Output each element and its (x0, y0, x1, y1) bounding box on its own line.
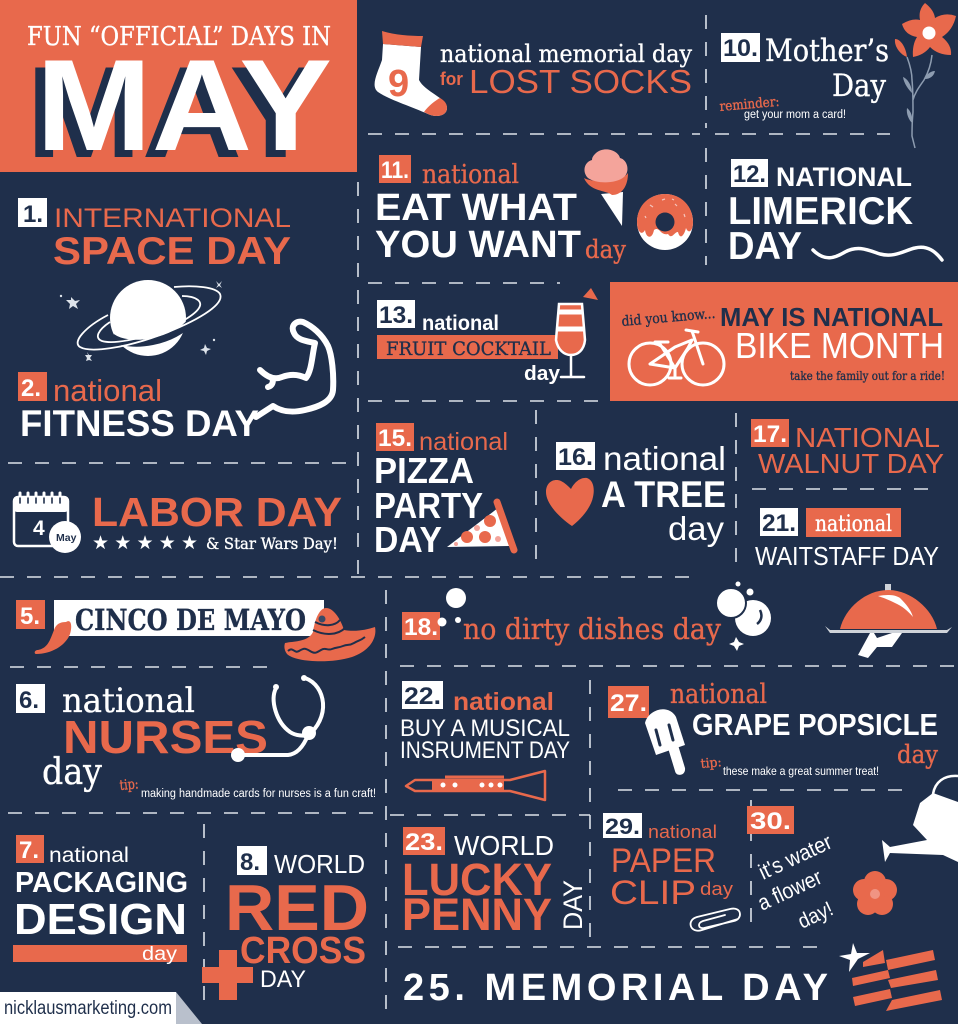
day 15: pizza party day: PIZZA (374, 450, 474, 491)
day 23: world lucky penny day: 23. (405, 829, 443, 856)
icon: popsicle (645, 709, 685, 775)
icon: sock (375, 31, 447, 116)
icon: wave line (813, 247, 942, 260)
day 2: national fitness day: 2. (21, 375, 41, 402)
day 11: eat what you want day: day (585, 235, 627, 264)
day 10: mother's day: Day (832, 68, 886, 104)
day 12: national limerick day: LIMERICK (728, 190, 913, 233)
day 29: national paper clip day: 29. (605, 814, 640, 839)
day 11: eat what you want day (375, 155, 627, 266)
day 16: national hug a tree day: 16. (558, 444, 593, 471)
day 13: fruit cocktail day: national (422, 312, 499, 335)
credit tab (0, 992, 202, 1024)
day 27: national grape popsicle day: these make a great summer treat! (723, 764, 879, 778)
day 10: mother's day: Mother’s (765, 33, 889, 69)
credit tab: nicklausmarketing.com (4, 998, 172, 1019)
icon: cocktail glass (556, 288, 598, 377)
day 5: cinco de mayo: 5. (20, 603, 40, 630)
icon: soap bubbles (716, 582, 771, 651)
icon: flower blossom (853, 871, 897, 915)
icon: calendar: 4 (33, 517, 45, 540)
day 15: pizza party day: 15. (378, 425, 412, 452)
day 17: national walnut day: WALNUT DAY (758, 448, 944, 479)
icon: donut (637, 194, 693, 250)
day 1: international space day (18, 198, 291, 273)
title banner (0, 0, 357, 185)
icon: bicycle (629, 330, 724, 385)
title shadow: MAY: MAY (26, 39, 322, 185)
day 5: cinco de mayo (16, 600, 375, 661)
day 23: world lucky penny day: PENNY (402, 889, 552, 940)
icon: ringed planet (60, 280, 222, 361)
day 13: fruit cocktail day: 13. (379, 302, 413, 329)
title: MAY: MAY (36, 32, 332, 178)
icon: chili pepper (35, 621, 71, 654)
day 27: national grape popsicle day: tip: (700, 755, 722, 772)
day 15: pizza party day: PARTY (374, 485, 483, 526)
icon: sombrero (284, 608, 375, 661)
day 13: fruit cocktail day: day (524, 363, 561, 385)
day 21: national waitstaff day: national (815, 512, 892, 537)
day 4: labor day and star wars day: LABOR DAY (92, 489, 342, 535)
icon: paper clip (691, 909, 740, 931)
day 11: eat what you want day: YOU WANT (375, 224, 581, 266)
day 23: world lucky penny day: DAY (558, 880, 588, 930)
icon: heart (546, 478, 594, 526)
day 8: world red cross day: RED (225, 871, 369, 944)
day 17: national walnut day: NATIONAL (795, 422, 940, 453)
day 6: national nurses day: 6. (19, 687, 39, 714)
day 23: world lucky penny day: LUCKY (402, 854, 552, 905)
day 8: world red cross day: DAY (260, 966, 306, 993)
day 6: national nurses day: national (62, 681, 195, 721)
day 30: water a flower day (747, 776, 958, 934)
day 7: national packaging design day: DESIGN (14, 895, 187, 944)
day 16: national hug a tree day: day (668, 510, 725, 547)
day 27: national grape popsicle day (608, 679, 939, 778)
day 29: national paper clip day: CLIP (610, 874, 696, 912)
day 12: national limerick day: NATIONAL (776, 162, 912, 192)
day 30: water a flower day: day! (794, 897, 837, 934)
day 13: fruit cocktail day: FRUIT COCKTAIL (386, 338, 551, 360)
day 23: world lucky penny day: WORLD (454, 830, 554, 861)
day 18: no dirty dishes day (402, 582, 771, 651)
day 6: national nurses day: day (42, 752, 103, 793)
day 10: mother's day: 10. (723, 35, 758, 62)
day 30: water a flower day: 30. (750, 808, 791, 835)
day 12: national limerick day: DAY (728, 225, 802, 268)
day 23: world lucky penny day (402, 827, 588, 940)
day 2: national fitness day: FITNESS DAY (20, 403, 259, 444)
day 17: national walnut day (751, 419, 944, 479)
day 11: eat what you want day: EAT WHAT (375, 187, 577, 229)
day 21: national waitstaff day (755, 508, 939, 571)
panel: bike month: BIKE MONTH (735, 325, 944, 366)
icon: calendar (14, 493, 81, 553)
day 10: mother's day: get your mom a card! (744, 109, 846, 121)
day 29: national paper clip day: PAPER (611, 842, 716, 880)
day 15: pizza party day (374, 423, 514, 560)
day 2: national fitness day: national (53, 373, 162, 408)
day 12: national limerick day: 12. (733, 161, 766, 188)
icon: pizza slice (447, 502, 514, 550)
icon: stethoscope (231, 675, 323, 762)
day 1: international space day: SPACE DAY (53, 230, 291, 273)
day 10: mother's day (719, 33, 889, 121)
icon: ice cream cone (584, 149, 628, 226)
day 22: buy a musical instrument day: 22. (404, 683, 441, 710)
day 16: national hug a tree day (546, 440, 726, 547)
icon: waving flag (839, 943, 942, 1011)
day 29: national paper clip day (603, 813, 740, 931)
day 4: labor day and star wars day: & Star Wars Day! (206, 534, 338, 553)
day 7: national packaging design day: 7. (19, 837, 39, 864)
icon: calendar: May (56, 532, 77, 544)
icon: serving tray and hand (825, 584, 952, 658)
day 12: national limerick day (728, 159, 942, 268)
day 25: memorial day: 25. MEMORIAL DAY (403, 967, 828, 1009)
day 17: national walnut day: 17. (753, 421, 787, 448)
icon: red cross (202, 950, 253, 1000)
title: fun official days in: FUN “OFFICIAL” DAYS IN (27, 22, 331, 52)
icon: watering can (882, 776, 958, 862)
day 9: lost socks day: national memorial day (440, 40, 692, 68)
day 22: buy a musical instrument day: national (453, 688, 554, 716)
day 21: national waitstaff day: 21. (762, 510, 796, 537)
day 27: national grape popsicle day: 27. (610, 690, 647, 717)
day 9: lost socks day: LOST SOCKS (469, 63, 692, 100)
day 5: cinco de mayo: CINCO DE MAYO (75, 603, 306, 637)
day 1: international space day: 1. (23, 201, 43, 228)
day 15: pizza party day: DAY (374, 519, 442, 560)
day 2: national fitness day (18, 372, 259, 444)
day 25: memorial day (403, 943, 942, 1011)
day 6: national nurses day: tip: (119, 776, 139, 794)
day 27: national grape popsicle day: national (670, 679, 767, 710)
day 8: world red cross day (202, 846, 369, 1000)
day 7: national packaging design day: PACKAGING (15, 867, 188, 899)
day 6: national nurses day: making handmade cards for nurses is a fun craft! (141, 788, 376, 800)
day 7: national packaging design day (13, 835, 188, 965)
day 8: world red cross day: 8. (240, 849, 260, 876)
day 8: world red cross day: CROSS (240, 930, 366, 972)
day 21: national waitstaff day: WAITSTAFF DAY (755, 541, 939, 571)
day 30: water a flower day: a flower (754, 864, 826, 916)
day 29: national paper clip day: national (648, 822, 717, 842)
day 18: no dirty dishes day: no dirty dishes day (463, 612, 722, 646)
day 18: no dirty dishes day: 18. (404, 614, 438, 641)
day 13: fruit cocktail day (377, 288, 598, 385)
day 15: pizza party day: national (419, 428, 508, 456)
day 29: national paper clip day: day (700, 879, 733, 899)
day 7: national packaging design day: day (142, 944, 178, 965)
day 30: water a flower day: it's water (755, 829, 836, 885)
panel: bike month: did you know... (621, 306, 716, 330)
icon: clarinet (406, 771, 545, 800)
panel: bike month: MAY IS NATIONAL (720, 302, 943, 332)
day 7: national packaging design day: national (49, 844, 129, 867)
day 9: lost socks day (375, 31, 692, 116)
day 10: mother's day: reminder: (719, 94, 780, 115)
day 6: national nurses day: NURSES (63, 711, 268, 763)
day 4: labor day and star wars day: ★★★★★ (92, 533, 198, 554)
day 6: national nurses day (16, 675, 376, 800)
icon: flexed arm (256, 322, 333, 417)
day 27: national grape popsicle day: day (897, 740, 939, 769)
panel: bike month (610, 282, 958, 401)
day 22: buy a musical instrument day: INSRUMENT DAY (400, 737, 570, 764)
day 22: buy a musical instrument day: BUY A MUSICAL (400, 715, 570, 742)
icon: flower (895, 3, 956, 148)
day 22: buy a musical instrument day (400, 681, 570, 800)
day 9: lost socks day: for (440, 69, 463, 89)
day 11: eat what you want day: national (422, 160, 519, 190)
day 8: world red cross day: WORLD (274, 849, 365, 879)
day 11: eat what you want day: 11. (381, 157, 409, 184)
day 16: national hug a tree day: A TREE (601, 474, 726, 515)
day 1: international space day: INTERNATIONAL (54, 203, 291, 233)
day 4: labor day and star wars day (14, 489, 342, 554)
icon: sock: 9 (388, 63, 409, 105)
day 16: national hug a tree day: national (603, 440, 726, 477)
